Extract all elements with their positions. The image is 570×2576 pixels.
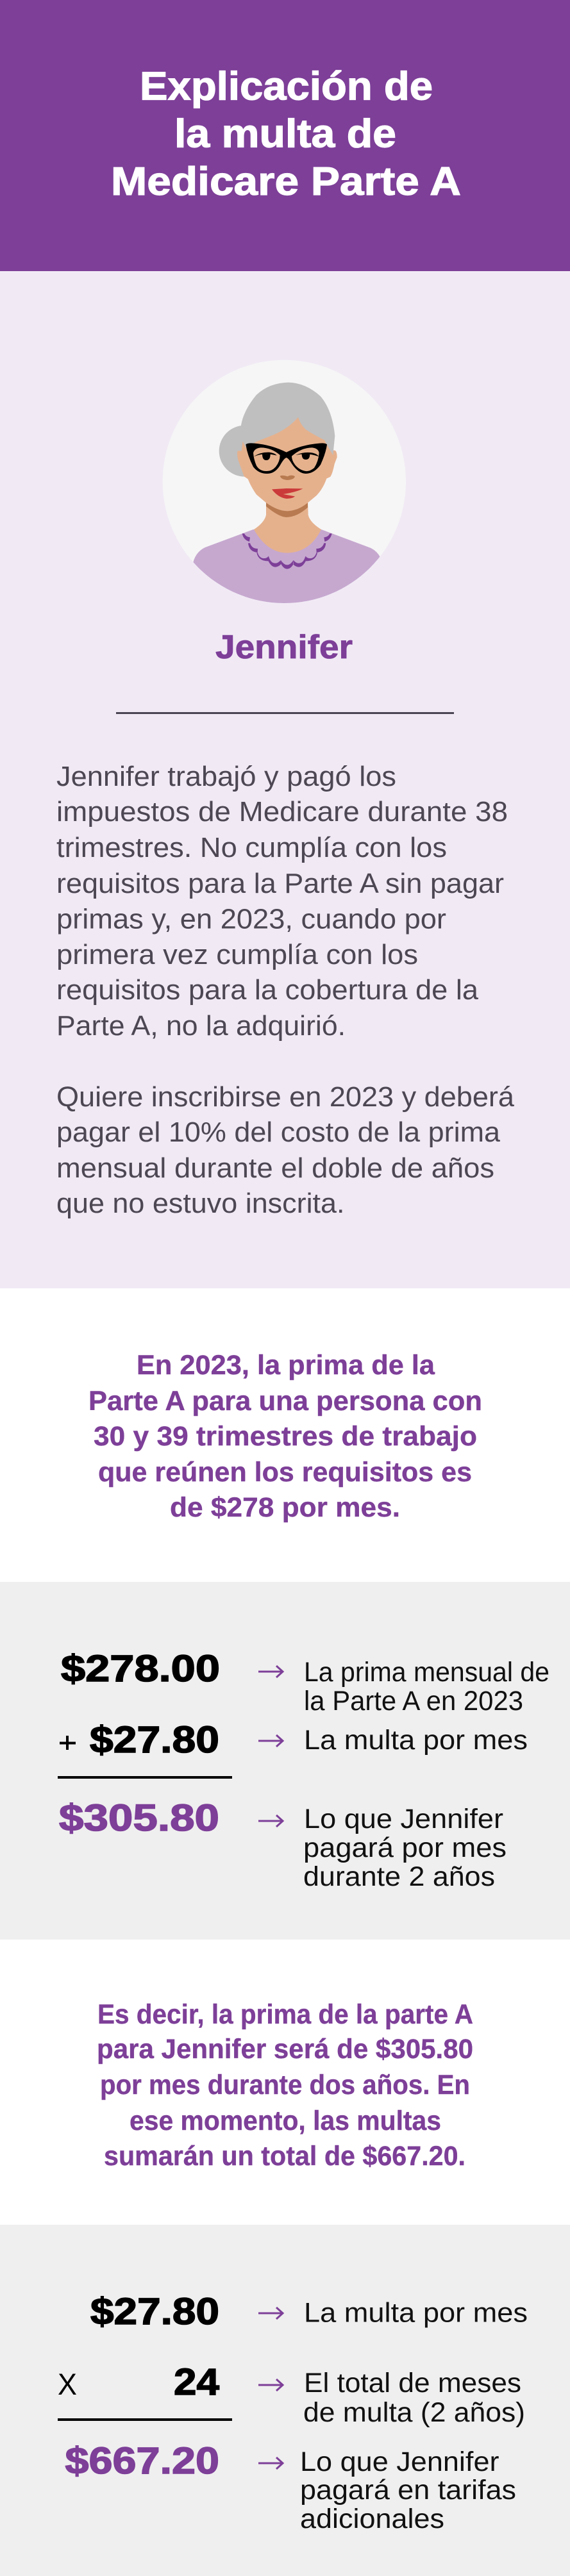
- row: monthly total: Lo que Jennifer: [304, 1804, 503, 1834]
- row: monthly premium: la Parte A en 2023: [304, 1686, 523, 1716]
- row: monthly penalty: $27.80: [90, 2291, 219, 2332]
- row: penalty months: de multa (2 años): [303, 2397, 525, 2428]
- panel: 2023 premium statement: 30 y 39 trimestres de trabajo: [94, 1421, 477, 1452]
- text block: Jennifer story: Jennifer trabajó y pagó los: [56, 761, 396, 792]
- text block: Jennifer story: requisitos para la cobertura de la: [56, 974, 479, 1006]
- panel: 2023 premium statement: de $278 por mes.: [170, 1492, 400, 1523]
- row: penalty months: X: [58, 2367, 77, 2401]
- panel: two-year statement: [0, 1940, 570, 2225]
- text block: enrollment penalty: Quiere inscribirse en 2023 y deberá: [56, 1081, 515, 1113]
- text block: Jennifer story: trimestres. No cumplía con los: [56, 832, 447, 863]
- row: penalty months: [58, 2361, 525, 2428]
- row: monthly penalty: La multa por mes: [304, 1725, 528, 1756]
- panel: two-year statement: ese momento, las multas: [130, 2106, 441, 2136]
- panel: two-year statement: sumarán un total de $667.20.: [104, 2141, 465, 2172]
- text block: Jennifer story: requisitos para la Parte A sin pagar: [56, 868, 504, 899]
- panel: 2023 premium statement: que reúnen los requisitos es: [98, 1457, 472, 1488]
- text block: Jennifer story: Parte A, no la adquirió.: [56, 1010, 346, 1042]
- text block: enrollment penalty: [56, 1081, 515, 1219]
- row: monthly total: [59, 1797, 507, 1892]
- row: monthly premium: [61, 1648, 549, 1716]
- row: total penalty: Lo que Jennifer: [300, 2447, 499, 2477]
- row: penalty months: 24: [174, 2361, 219, 2403]
- panel: Jennifer profile: [0, 271, 570, 1288]
- row: monthly total: pagará por mes: [303, 1832, 507, 1863]
- panel: 2023 premium statement: Parte A para una persona con: [88, 1386, 482, 1417]
- text block: enrollment penalty: que no estuvo inscrita.: [56, 1188, 345, 1219]
- panel: total penalty calculation: [0, 2225, 570, 2576]
- title: Explicación de: [140, 64, 433, 109]
- text block: Jennifer story: primas y, en 2023, cuando por: [56, 904, 446, 935]
- text block: enrollment penalty: pagar el 10% del costo de la prima: [56, 1117, 501, 1148]
- title: [111, 64, 461, 204]
- panel: header: [0, 0, 570, 271]
- row: monthly penalty: [60, 1719, 528, 1761]
- panel: 2023 premium statement: En 2023, la prima de la: [137, 1350, 435, 1381]
- panel: two-year statement: para Jennifer será de $305.80: [97, 2034, 473, 2065]
- heading: Jennifer: Jennifer: [215, 629, 353, 666]
- row: monthly penalty: $27.80: [90, 1719, 219, 1761]
- text block: Jennifer story: [56, 761, 508, 1042]
- panel: two-year statement: Es decir, la prima de la parte A: [97, 1999, 473, 2030]
- row: monthly premium: La prima mensual de: [304, 1657, 549, 1688]
- row: total penalty: pagará en tarifas: [300, 2475, 516, 2505]
- row: total penalty: $667.20: [65, 2440, 219, 2482]
- title: la multa de: [174, 112, 396, 156]
- row: total penalty: adicionales: [300, 2504, 444, 2534]
- row: total penalty: [65, 2440, 516, 2534]
- icon: Jennifer portrait: [163, 360, 406, 604]
- panel: 2023 premium statement: [0, 1288, 570, 1582]
- row: monthly premium: $278.00: [61, 1648, 220, 1690]
- text block: enrollment penalty: mensual durante el doble de años: [56, 1152, 494, 1184]
- text block: Jennifer story: impuestos de Medicare durante 38: [56, 796, 508, 827]
- row: monthly total: durante 2 años: [303, 1861, 495, 1892]
- panel: monthly premium calculation: [0, 1582, 570, 1940]
- row: penalty months: El total de meses: [304, 2368, 521, 2398]
- panel: two-year statement: por mes durante dos años. En: [100, 2070, 470, 2100]
- row: monthly penalty: [90, 2291, 528, 2332]
- row: monthly total: $305.80: [59, 1797, 219, 1839]
- text block: Jennifer story: primera vez cumplía con los: [56, 939, 418, 970]
- title: Medicare Parte A: [111, 160, 461, 204]
- row: monthly penalty: La multa por mes: [304, 2297, 528, 2328]
